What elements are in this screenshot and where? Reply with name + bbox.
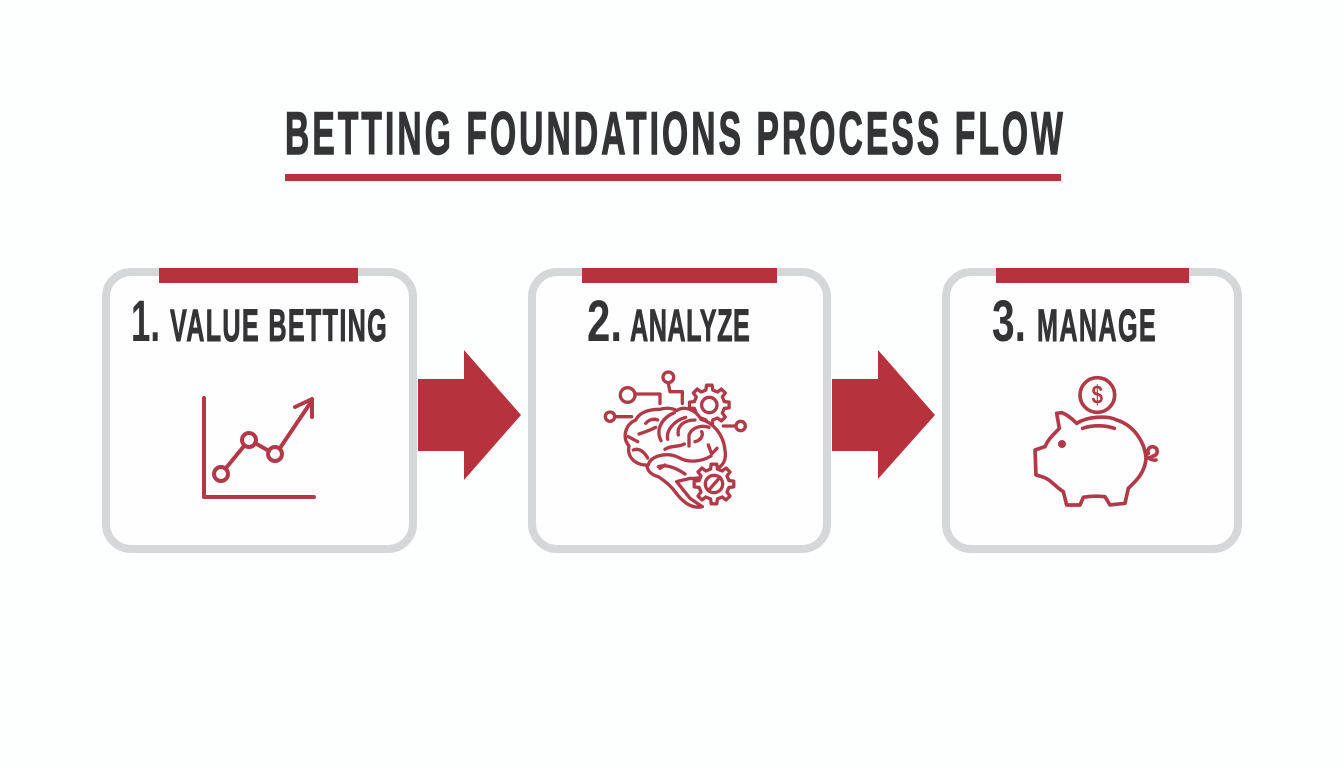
coin slot — [1083, 426, 1114, 428]
heading: step 3: MANAGE — [1037, 300, 1156, 351]
title: BETTING FOUNDATIONS PROCESS FLOW — [285, 101, 1063, 168]
icon: brain with gears — [605, 372, 745, 507]
arrow: step 2 to step 3 — [832, 350, 935, 479]
brain — [625, 408, 725, 507]
panel: step 1 value betting — [106, 268, 413, 549]
heading: step 1 — [131, 289, 387, 354]
gear: bottom — [694, 464, 734, 504]
icon: line chart with rising arrow — [204, 398, 314, 497]
gear: top — [690, 385, 729, 425]
icon: piggy bank with coin — [1035, 378, 1157, 505]
heading: step 2 — [587, 289, 750, 354]
circuit nodes — [605, 372, 745, 431]
arrow: step 1 to step 2 — [418, 350, 521, 480]
heading: step 2: 2. — [587, 289, 622, 354]
heading: step 1: VALUE BETTING — [170, 300, 387, 351]
panel: step 3 manage — [946, 268, 1238, 549]
coin: $ — [1092, 380, 1103, 409]
heading: step 3 — [992, 289, 1156, 354]
panel: step 2 analyze — [532, 268, 827, 549]
heading: step 3: 3. — [992, 289, 1026, 354]
heading: step 2: ANALYZE — [630, 300, 750, 351]
tail — [1146, 447, 1157, 460]
pig body — [1035, 413, 1146, 505]
eye — [1058, 440, 1066, 448]
heading: step 1: 1. — [131, 289, 160, 354]
